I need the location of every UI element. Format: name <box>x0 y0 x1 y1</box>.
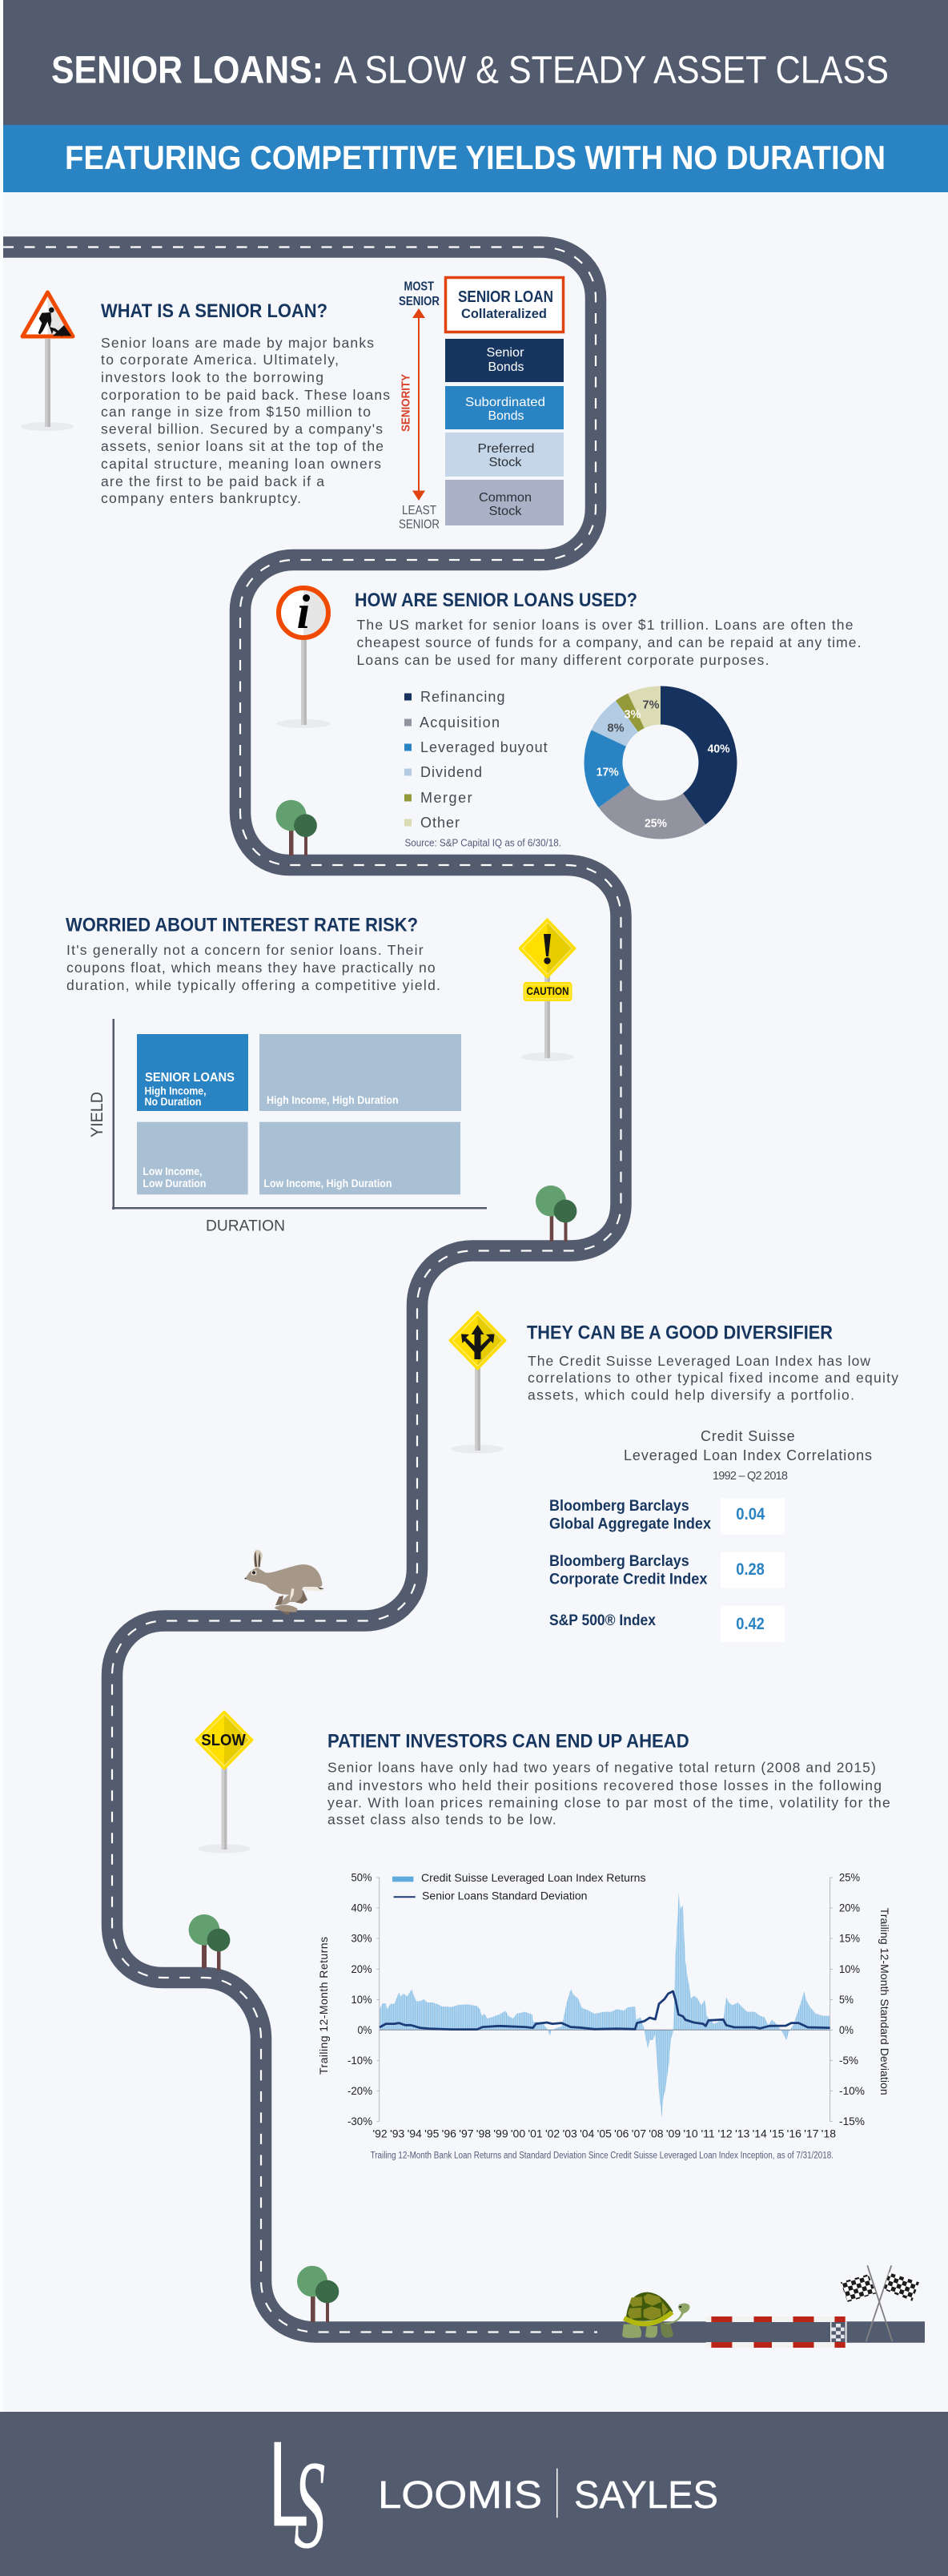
seniority scale: SENIOR <box>399 517 440 532</box>
heading: HOW ARE SENIOR LOANS USED? <box>355 590 637 611</box>
year labels: '17 <box>804 2127 819 2139</box>
year labels: '13 <box>735 2127 750 2139</box>
axis label: duration: DURATION <box>206 1218 285 1235</box>
right axis labels: 25% <box>839 1871 860 1884</box>
text block: can range in size from $150 million to <box>101 404 371 420</box>
right axis labels: -5% <box>839 2054 858 2067</box>
icon: trees <box>189 1914 230 1970</box>
year labels: '16 <box>787 2127 801 2139</box>
right axis labels: 5% <box>839 1993 854 2006</box>
chart legend <box>392 1871 645 1902</box>
text block: Senior loans have only had two years of negative total return (2008 and 2015) <box>327 1760 876 1776</box>
title banner <box>3 0 948 125</box>
capital structure stack: Subordinated <box>465 396 545 409</box>
year labels: '04 <box>580 2127 595 2139</box>
right axis labels: -15% <box>839 2115 865 2127</box>
icon: slow sign <box>196 1712 252 1854</box>
correlation row: s&p 500: S&P 500® Index <box>549 1612 656 1629</box>
year labels: '92 <box>372 2127 388 2139</box>
text block <box>327 1760 890 1828</box>
text block: Senior loans are made by major banks <box>101 335 374 351</box>
correlation row: global aggregate: Global Aggregate Index <box>549 1516 711 1533</box>
right axis labels: 10% <box>839 1962 860 1975</box>
quadrant: senior loans: SENIOR LOANS <box>145 1071 235 1085</box>
capital structure stack: SENIOR LOAN <box>458 288 553 306</box>
year labels: '18 <box>821 2127 836 2139</box>
left axis labels: 30% <box>351 1932 372 1945</box>
logo wordmark: SAYLES <box>574 2474 718 2517</box>
quadrant: high income high duration: High Income, High Duration <box>267 1093 399 1106</box>
text block: Loans can be used for many different corporate purposes. <box>357 652 769 668</box>
right axis labels: -10% <box>839 2084 865 2097</box>
text block: The US market for senior loans is over $1 trillion. Loans are often the <box>357 617 854 633</box>
year labels: '99 <box>493 2127 508 2139</box>
year labels: '15 <box>769 2127 785 2139</box>
correlation row: global aggregate: Bloomberg Barclays <box>549 1498 689 1515</box>
quadrant: low income high duration <box>259 1122 460 1194</box>
icon: caution sign: CAUTION <box>527 984 568 997</box>
text block: are the first to be paid back if a <box>101 473 324 489</box>
year labels: '06 <box>614 2127 629 2139</box>
text block: assets, senior loans sit at the top of the <box>101 438 384 454</box>
correlation table title: Credit Suisse <box>701 1428 795 1444</box>
axes <box>376 1878 833 2121</box>
year labels: '97 <box>459 2127 474 2139</box>
left axis labels: 20% <box>351 1962 372 1975</box>
text block: to corporate America. Ultimately, <box>101 352 339 368</box>
chart footnote: Trailing 12-Month Bank Loan Returns and Standard Deviation Since Credit Suisse Leveraged Loan Index Inception, as of 7/31/2018. <box>371 2151 834 2160</box>
logo mark: S <box>294 2436 325 2575</box>
seniority scale: SENIORITY <box>399 374 413 432</box>
icon: hare <box>245 1550 324 1615</box>
left axis labels: 10% <box>351 1993 372 2006</box>
text block: The Credit Suisse Leveraged Loan Index has low <box>528 1353 870 1369</box>
text block <box>101 335 390 506</box>
capital structure stack: Bonds <box>488 409 524 423</box>
text block: investors look to the borrowing <box>101 369 323 385</box>
year labels: '10 <box>683 2127 698 2139</box>
logo mark: L <box>268 2416 309 2552</box>
right axis labels: 20% <box>839 1902 860 1914</box>
capital structure stack: Common <box>479 491 532 505</box>
icon: road works sign <box>21 292 74 431</box>
correlation row: corporate credit: Corporate Credit Index <box>549 1572 708 1588</box>
source note: Source: S&P Capital IQ as of 6/30/18. <box>405 837 561 849</box>
axis label: yield: YIELD <box>88 1092 106 1137</box>
correlation table title: Leveraged Loan Index Correlations <box>624 1447 872 1463</box>
right axis title: Trailing 12-Month Standard Deviation <box>878 1908 891 2095</box>
logo wordmark: LOOMIS <box>378 2474 542 2517</box>
donut chart <box>584 686 737 839</box>
quadrant: low income high duration: Low Income, High Duration <box>263 1177 392 1189</box>
correlation table title: 1992 – Q2 2018 <box>713 1470 788 1483</box>
seniority scale: LEAST <box>402 504 436 517</box>
left axis title: Trailing 12-Month Returns <box>317 1937 330 2075</box>
returns and standard deviation chart <box>317 1871 891 2160</box>
icon: trees <box>297 2266 339 2322</box>
chart legend: Leveraged buyout <box>420 739 548 755</box>
seniority scale: SENIOR <box>399 295 440 308</box>
capital structure stack: Senior <box>487 346 524 360</box>
icon: trees <box>276 800 317 855</box>
capital structure stack: Preferred <box>477 442 535 456</box>
title <box>51 50 889 91</box>
icon: caution sign <box>520 920 575 1061</box>
quadrant: senior loans: No Duration <box>144 1095 202 1108</box>
capital structure stack <box>445 277 564 525</box>
capital structure stack: Collateralized <box>461 306 547 321</box>
correlation row: s&p 500: 0.42 <box>736 1615 765 1633</box>
left axis labels: -10% <box>347 2054 372 2067</box>
road <box>3 247 925 2332</box>
text block: cheapest source of funds for a company, and can be repaid at any time. <box>357 634 862 650</box>
text block <box>528 1353 898 1403</box>
text block: capital structure, meaning loan owners <box>101 456 381 472</box>
icon: tortoise <box>622 2292 689 2338</box>
capital structure stack: Stock <box>488 456 523 469</box>
text block: year. With loan prices remaining close to par most of the time, volatility for the <box>327 1795 890 1811</box>
chart legend: Refinancing <box>420 689 504 705</box>
panel: patient investors <box>189 1712 891 2160</box>
capital structure stack: Bonds <box>488 360 524 374</box>
heading: PATIENT INVESTORS CAN END UP AHEAD <box>327 1731 689 1753</box>
standard deviation line <box>380 1991 830 2030</box>
text block: correlations to other typical fixed income and equity <box>528 1370 898 1386</box>
logo wordmark <box>378 2469 718 2518</box>
year labels <box>372 2127 836 2139</box>
chart legend: Other <box>420 815 460 831</box>
correlation row: corporate credit <box>549 1552 785 1588</box>
left axis labels: 0% <box>357 2023 372 2036</box>
correlation table title <box>624 1428 872 1483</box>
heading: THEY CAN BE A GOOD DIVERSIFIER <box>527 1322 833 1344</box>
correlation row: corporate credit: Bloomberg Barclays <box>549 1553 689 1570</box>
donut chart: 17% <box>597 766 619 779</box>
year labels: '07 <box>632 2127 646 2139</box>
year labels: '08 <box>649 2127 664 2139</box>
correlation row: s&p 500 <box>549 1606 785 1642</box>
seniority scale <box>399 280 440 532</box>
finish area <box>297 2265 919 2348</box>
icon: checkered flags <box>841 2265 919 2341</box>
year labels: '98 <box>476 2127 491 2139</box>
chart legend: Credit Suisse Leveraged Loan Index Returns <box>421 1871 645 1884</box>
footer <box>0 2412 948 2576</box>
year labels: '96 <box>442 2127 456 2139</box>
left axis labels: -30% <box>347 2115 372 2127</box>
year labels: '01 <box>528 2127 543 2139</box>
chart legend <box>404 689 548 831</box>
seniority scale: MOST <box>404 280 434 293</box>
donut chart: 3% <box>625 708 641 721</box>
correlation row: corporate credit: 0.28 <box>736 1560 765 1579</box>
panel: what is a senior loan <box>21 277 564 532</box>
heading: WORRIED ABOUT INTEREST RATE RISK? <box>66 915 418 936</box>
capital structure stack: Stock <box>488 505 523 518</box>
year labels: '14 <box>753 2127 767 2139</box>
icon: information sign <box>276 586 331 728</box>
title: A SLOW & STEADY ASSET CLASS <box>334 50 889 91</box>
panel: how are senior loans used <box>276 586 862 855</box>
yield vs duration matrix <box>88 1019 487 1235</box>
icon: information sign: i <box>297 586 311 638</box>
donut chart: 8% <box>607 721 625 735</box>
year labels: '11 <box>701 2127 715 2139</box>
finish line curbs <box>706 2316 847 2348</box>
year labels: '94 <box>408 2127 422 2139</box>
left axis labels: -20% <box>347 2084 372 2097</box>
subtitle banner <box>3 125 948 192</box>
donut chart: 7% <box>642 698 660 711</box>
title: SENIOR LOANS: <box>51 50 323 91</box>
subtitle banner: FEATURING COMPETITIVE YIELDS WITH NO DURATION <box>65 139 886 176</box>
donut chart: 40% <box>708 742 730 756</box>
text block: coupons float, which means they have practically no <box>66 960 436 976</box>
year labels: '03 <box>563 2127 577 2139</box>
left axis labels: 50% <box>351 1871 372 1884</box>
icon: three-way arrow sign <box>450 1312 505 1453</box>
year labels: '02 <box>545 2127 560 2139</box>
text block: and investors who held their positions recovered those losses in the following <box>327 1777 882 1793</box>
quadrant: low income low duration: Low Duration <box>143 1177 206 1189</box>
chart legend: Acquisition <box>420 714 500 731</box>
text block: corporation to be paid back. These loans <box>101 387 390 403</box>
left axis labels <box>347 1871 372 2127</box>
text block: assets, which could help diversify a portfolio. <box>528 1387 854 1403</box>
panel: diversifier <box>245 1312 898 1642</box>
chart legend: Merger <box>420 790 472 806</box>
text block <box>357 617 862 668</box>
return bars <box>380 1893 830 2118</box>
quadrant: low income low duration: Low Income, <box>143 1165 202 1177</box>
year labels: '05 <box>597 2127 612 2139</box>
quadrant: low income low duration <box>137 1122 248 1194</box>
right axis labels <box>839 1871 865 2127</box>
right axis labels: 0% <box>839 2023 854 2036</box>
text block: It's generally not a concern for senior loans. Their <box>66 942 424 958</box>
year labels: '93 <box>390 2127 405 2139</box>
year labels: '12 <box>717 2127 733 2139</box>
heading: WHAT IS A SENIOR LOAN? <box>101 300 327 322</box>
text block: several billion. Secured by a company's <box>101 421 383 437</box>
panel: interest rate risk <box>66 915 576 1242</box>
quadrant: senior loans <box>137 1034 248 1111</box>
quadrant: senior loans: High Income, <box>144 1085 207 1097</box>
correlation row: global aggregate: 0.04 <box>736 1505 765 1523</box>
year labels: '00 <box>511 2127 525 2139</box>
quadrant: high income high duration <box>259 1034 461 1111</box>
logo mark <box>268 2416 325 2575</box>
text block <box>66 942 440 993</box>
icon: slow sign: SLOW <box>201 1732 246 1749</box>
year labels: '95 <box>424 2127 440 2139</box>
text block: company enters bankruptcy. <box>101 490 301 506</box>
icon: trees <box>536 1185 576 1242</box>
text block: asset class also tends to be low. <box>327 1812 556 1828</box>
chart legend: Dividend <box>420 764 482 780</box>
text block: duration, while typically offering a competitive yield. <box>66 977 440 993</box>
right axis labels: 15% <box>839 1932 860 1945</box>
donut chart: 25% <box>645 817 667 830</box>
year labels: '09 <box>666 2127 681 2139</box>
left axis labels: 40% <box>351 1902 372 1914</box>
chart legend: Senior Loans Standard Deviation <box>422 1890 588 1902</box>
correlation row: global aggregate <box>549 1498 785 1535</box>
